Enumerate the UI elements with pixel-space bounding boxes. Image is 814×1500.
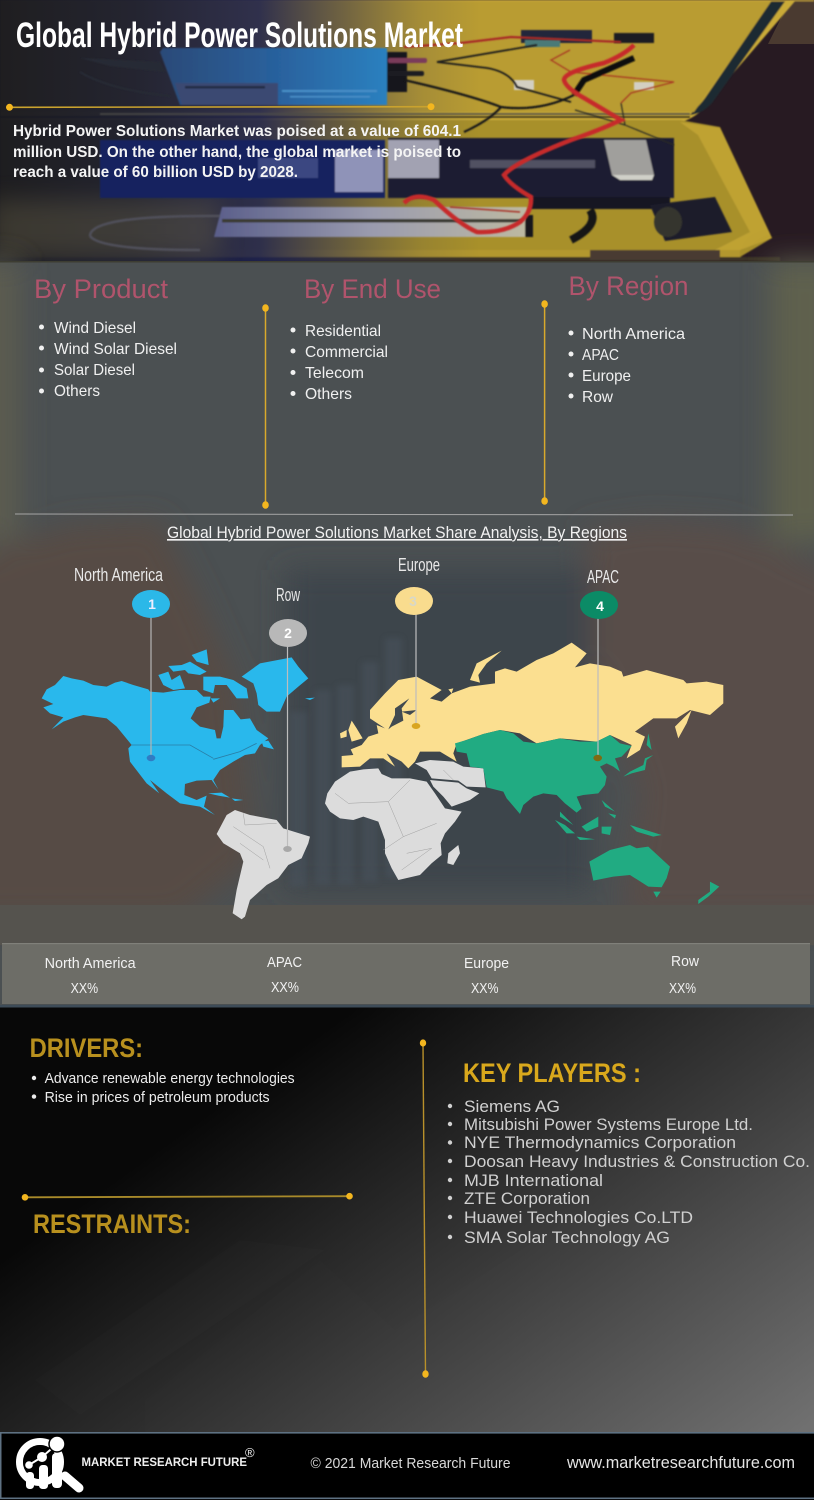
- list: end use segments: Residential: [305, 323, 381, 340]
- text block: market summary: reach a value of 60 billion USD by 2028.: [13, 164, 298, 181]
- map pin: Europe: 3: [409, 593, 417, 609]
- chart: world map by region: [42, 643, 723, 919]
- panel: regional share table: XX%: [71, 980, 98, 997]
- list: key players: [448, 1098, 810, 1247]
- list: drivers: Advance renewable energy technologies: [45, 1070, 295, 1087]
- panel: hero photo background: [0, 0, 814, 261]
- divider: drivers vs restraints: [22, 1193, 353, 1201]
- map region: Europe and Russia: [340, 643, 723, 768]
- white rail: [214, 207, 527, 237]
- panel: footer: [0, 1432, 814, 1500]
- list: region segments: Row: [582, 389, 613, 406]
- panel: regional share table: North America: [45, 955, 136, 972]
- list: drivers: [32, 1070, 295, 1106]
- map pin: APAC: 4: [596, 598, 604, 614]
- map pin: Row: [269, 585, 307, 852]
- map pin: North America: North America: [74, 565, 164, 585]
- text block: market summary: Hybrid Power Solutions Market was poised at a value of 604.1: [13, 123, 461, 140]
- list: product segments: Solar Diesel: [54, 362, 135, 379]
- panel: regional share table: XX%: [471, 980, 498, 997]
- heading: By Product: By Product: [34, 274, 169, 304]
- map pin: North America: 1: [148, 596, 156, 612]
- heading: By Region: By Region: [568, 271, 688, 301]
- list: product segments: Others: [54, 383, 100, 400]
- list: end use segments: [290, 323, 388, 403]
- battery right: [388, 138, 674, 198]
- divider: hero gold line: [6, 103, 434, 111]
- text block: market summary: [13, 123, 461, 181]
- panel: regional share table: [2, 943, 810, 1004]
- panel: regional share table: XX%: [271, 979, 299, 996]
- list: region segments: Europe: [582, 368, 631, 385]
- divider: end use vs region: [541, 300, 548, 505]
- title: Global Hybrid Power Solutions Market: [16, 16, 463, 55]
- list: product segments: Wind Solar Diesel: [54, 341, 177, 358]
- list: end use segments: Others: [305, 386, 352, 403]
- map pin: North America: [74, 565, 170, 761]
- heading: key players: KEY PLAYERS :: [463, 1058, 641, 1088]
- map region: Asia Pacific: [455, 730, 719, 904]
- list: key players: Doosan Heavy Industries & Construction Co.: [464, 1153, 810, 1171]
- map pin: Europe: Europe: [398, 555, 440, 575]
- battery left: [100, 140, 385, 198]
- list: key players: NYE Thermodynamics Corporation: [464, 1134, 736, 1152]
- heading: map share analysis: Global Hybrid Power Solutions Market Share Analysis, By Regions: [167, 524, 627, 542]
- divider: product vs end use: [262, 304, 269, 509]
- list: region segments: APAC: [582, 347, 619, 364]
- list: key players: SMA Solar Technology AG: [464, 1229, 670, 1247]
- map region: North America: [42, 649, 315, 815]
- map region: Rest of World: [217, 760, 486, 919]
- wires: [404, 37, 674, 232]
- list: region segments: [568, 326, 685, 406]
- map pin: Europe: [395, 555, 440, 729]
- footer website: www.marketresearchfuture.com: [566, 1453, 795, 1472]
- list: key players: Siemens AG: [464, 1098, 560, 1116]
- list: key players: ZTE Corporation: [464, 1190, 590, 1208]
- blue inverter: [80, 30, 732, 250]
- panel: segments and map background: [0, 261, 814, 1007]
- text block: market summary: million USD. On the other hand, the global market is poised to: [13, 144, 461, 161]
- panel: regional share table: Europe: [464, 955, 509, 972]
- list: product segments: [39, 320, 177, 400]
- map pin: Row: 2: [284, 625, 292, 641]
- list: drivers: Rise in prices of petroleum products: [45, 1089, 270, 1106]
- panel: drivers, restraints and key players background: [0, 1005, 814, 1433]
- heading: By End Use: By End Use: [304, 274, 441, 304]
- list: key players: Mitsubishi Power Systems Europe Ltd.: [464, 1116, 753, 1134]
- list: region segments: North America: [582, 326, 685, 343]
- list: key players: Huawei Technologies Co.LTD: [464, 1209, 693, 1227]
- footer registered mark: ®: [245, 1445, 255, 1460]
- divider: left column vs key players: [420, 1039, 429, 1378]
- list: product segments: Wind Diesel: [54, 320, 136, 337]
- panel: regional share table: XX%: [669, 980, 696, 997]
- connectors: [521, 30, 592, 43]
- map pin: Row: Row: [276, 585, 301, 605]
- panel: regional share table: Row: [671, 953, 699, 970]
- footer copyright: © 2021 Market Research Future: [310, 1455, 510, 1472]
- footer brand name: MARKET RESEARCH FUTURE: [82, 1457, 247, 1469]
- map pin: APAC: [580, 567, 619, 761]
- box controls: [650, 197, 732, 241]
- list: end use segments: Telecom: [305, 365, 364, 382]
- heading: restraints: RESTRAINTS:: [33, 1209, 191, 1239]
- map pin: APAC: APAC: [587, 567, 619, 587]
- list: key players: MJB International: [464, 1172, 603, 1190]
- panel: regional share table: APAC: [267, 954, 302, 971]
- list: end use segments: Commercial: [305, 344, 388, 361]
- icon: market research future logo: [20, 1436, 79, 1489]
- heading: drivers: DRIVERS:: [30, 1033, 143, 1063]
